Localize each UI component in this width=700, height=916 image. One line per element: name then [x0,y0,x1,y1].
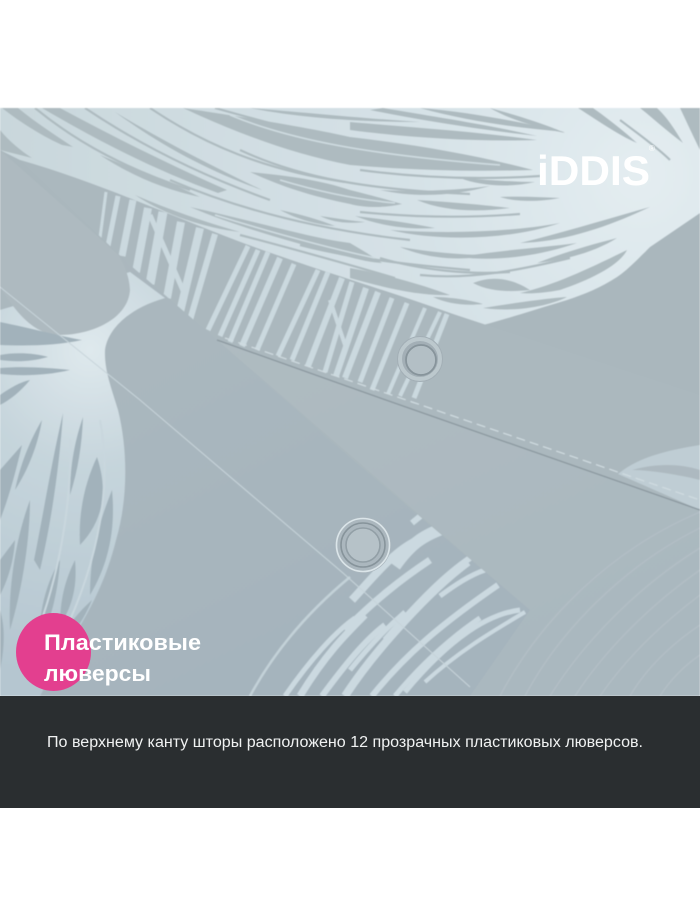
large flower [0,272,165,696]
logo: iddis: iDDIS [537,147,650,194]
heading: plastic eyelets [44,630,201,686]
heading: plastic eyelets: Пластиковые [44,630,201,655]
hem shadow line and stitches [217,340,700,510]
dark caption band [0,696,700,808]
hem band with vertical stripes [98,192,700,510]
photo: shower curtain fabric [0,108,700,696]
front flap [0,272,526,696]
light strands over bands [215,115,500,258]
registered mark: ® [649,144,655,153]
pink circle accent [16,613,91,691]
fold stitch line [0,287,470,687]
flower outline strands [42,492,104,618]
thin streaks [34,108,671,278]
bottom right stripes [250,577,350,696]
plain petal over flower [14,273,130,336]
lower curtain layer [217,340,700,696]
faint arcs [500,512,700,696]
plain grey fabric at right [0,108,700,696]
dark slivers in flower [0,322,113,670]
hem pattern at right edge [618,445,700,510]
heading: plastic eyelets: люверсы [44,661,151,686]
top curtain layer with flower pattern [0,108,700,325]
caption text: По верхнему канту шторы расположено 12 прозрачных пластиковых люверсов. [47,734,643,751]
icon: upper eyelet [397,336,443,382]
icon: lower transparent eyelet [335,517,391,573]
